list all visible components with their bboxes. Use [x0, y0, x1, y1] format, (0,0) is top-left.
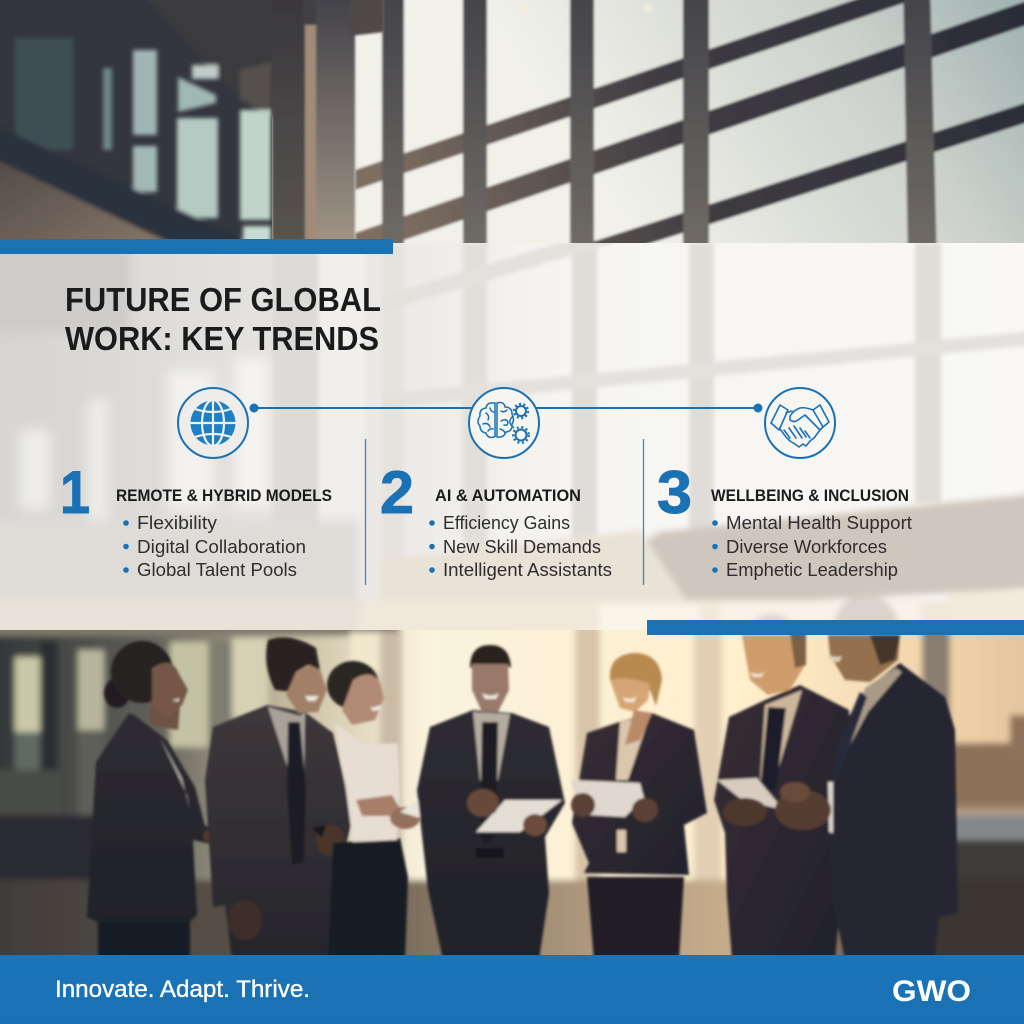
column 2: AI and automation: [380, 459, 612, 580]
title: FUTURE OF GLOBAL: [65, 281, 381, 318]
column 2: AI and automation: Intelligent Assistants: [443, 560, 612, 580]
connector line between icons: [250, 404, 762, 412]
tagline: Innovate. Adapt. Thrive.: [55, 976, 310, 1003]
column 3: wellbeing and inclusion: Emphetic Leadership: [726, 560, 898, 580]
column 2: AI and automation: 2: [380, 459, 414, 526]
logo: GWO: [892, 975, 971, 1008]
bottom photo: team of professionals: [0, 630, 1024, 955]
divider between columns 2 and 3: [642, 439, 644, 585]
person 4: man with document: [417, 645, 565, 960]
upper-left interior: [0, 0, 272, 263]
photo background: sunlit windows: [0, 630, 1024, 955]
accent bar: top left: [0, 239, 393, 254]
accent bar: lower right: [647, 620, 1024, 635]
title: WORK: KEY TRENDS: [65, 320, 379, 357]
top photo: office windows: [0, 0, 1024, 243]
column 3: wellbeing and inclusion: [657, 459, 912, 580]
column 3: wellbeing and inclusion: WELLBEING & INCLUSION: [711, 486, 909, 505]
pale window frames seen through the panel: [385, 245, 402, 555]
column 1: remote and hybrid models: REMOTE & HYBRID MODELS: [116, 486, 332, 505]
icon: brain and gears: [469, 388, 539, 458]
title: [65, 281, 381, 357]
column 1: remote and hybrid models: 1: [60, 459, 90, 526]
column 2: AI and automation: New Skill Demands: [443, 537, 601, 557]
column 2: AI and automation: Efficiency Gains: [443, 513, 570, 533]
person 7: man in foreground: [775, 635, 958, 960]
column 1: remote and hybrid models: [60, 459, 332, 580]
person 6: man with glasses: [714, 632, 850, 960]
icon: globe: [178, 388, 248, 458]
divider between columns 1 and 2: [364, 439, 366, 585]
column 1: remote and hybrid models: Global Talent Pools: [137, 560, 297, 580]
person 5: woman with short hair: [570, 653, 707, 960]
person 2: man in grey suit: [205, 637, 353, 960]
column 1: remote and hybrid models: Flexibility: [137, 513, 217, 533]
column 2: AI and automation: AI & AUTOMATION: [435, 486, 581, 505]
column 3: wellbeing and inclusion: Diverse Workforces: [726, 537, 887, 557]
person 1: woman with bun: [86, 640, 210, 955]
column 3: wellbeing and inclusion: Mental Health Support: [726, 513, 912, 533]
column 3: wellbeing and inclusion: 3: [657, 459, 692, 526]
footer band: [0, 955, 1024, 1024]
column 1: remote and hybrid models: Digital Collaboration: [137, 537, 306, 557]
icon: handshake: [765, 388, 835, 458]
translucent white content panel: [0, 243, 1024, 630]
person 3: woman in white blouse: [325, 659, 422, 955]
